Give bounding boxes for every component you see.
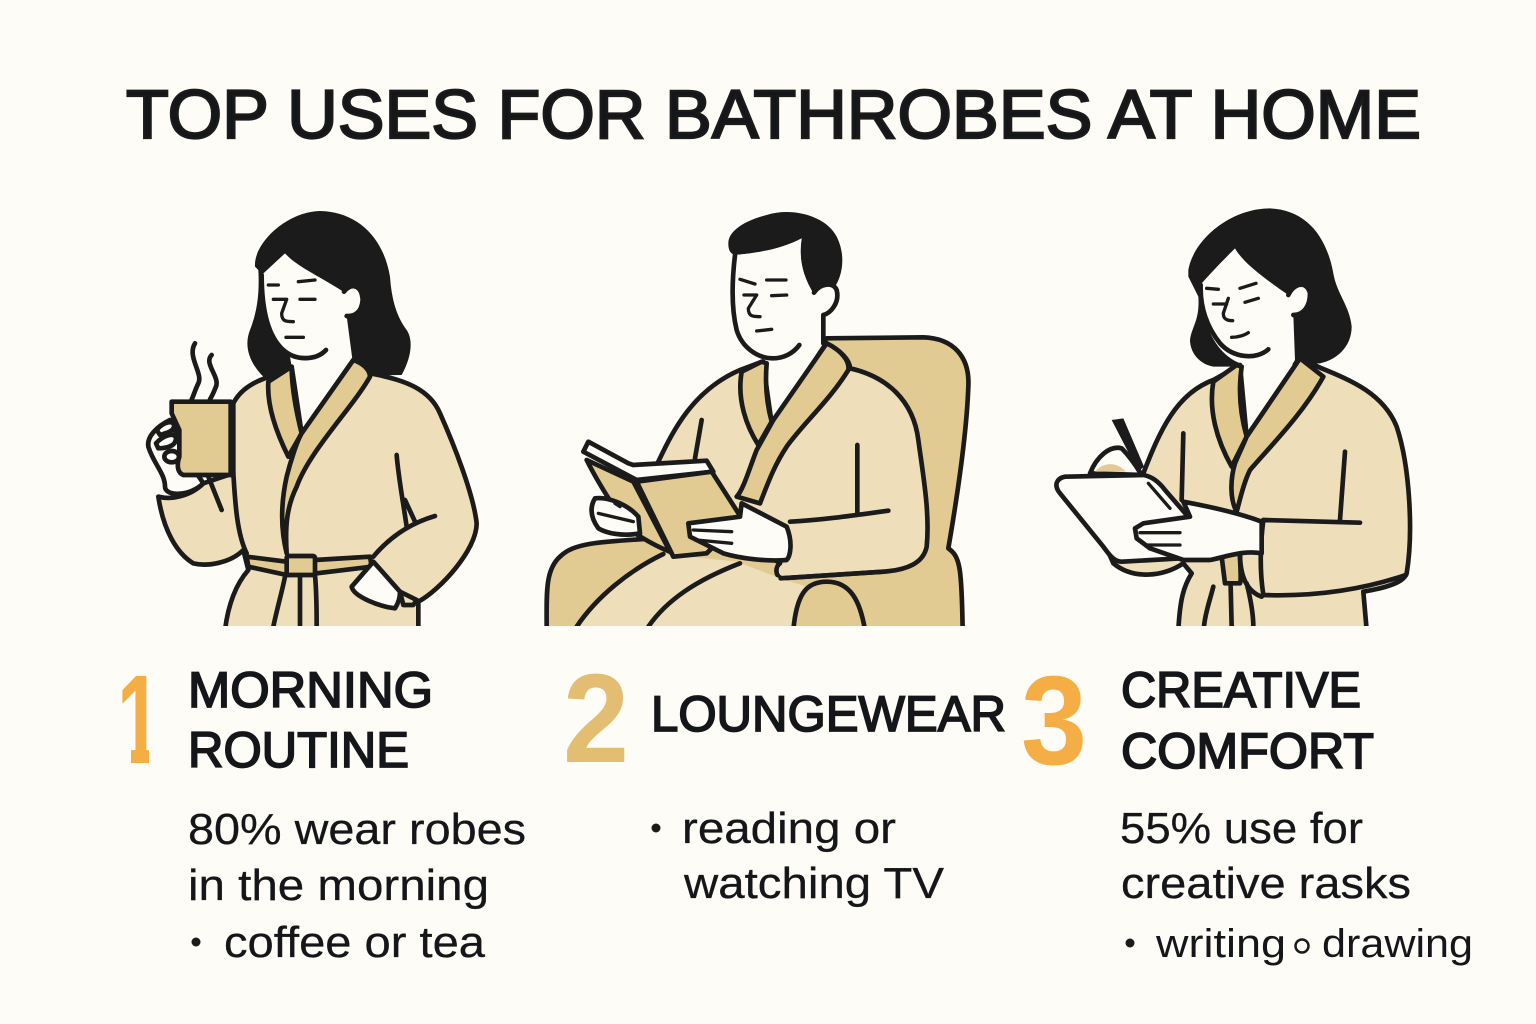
heading (188, 662, 433, 778)
illustration: woman writing on tablet (1056, 208, 1410, 630)
body text: in the morning (188, 861, 489, 910)
face and neck (1201, 248, 1310, 437)
blanket over lap (577, 554, 807, 627)
facial features (1207, 283, 1258, 337)
face and neck (262, 253, 363, 437)
right hand (1135, 502, 1262, 560)
body text: creative rasks (1121, 859, 1411, 908)
icon: coffee mug (172, 402, 231, 475)
icon: steam (192, 343, 217, 399)
heading: MORNING (188, 662, 433, 718)
body text: watching TV (683, 859, 945, 908)
body text (652, 804, 945, 908)
number 2: 2 (563, 648, 629, 789)
illustration: woman with coffee mug (148, 211, 477, 630)
robe body (1100, 358, 1410, 630)
armchair (547, 337, 968, 630)
heading: LOUNGEWEAR (651, 686, 1006, 742)
robe collar (740, 362, 772, 445)
section 2: loungewear (563, 648, 1006, 908)
number 3: 3 (1021, 650, 1087, 791)
chair arm (793, 582, 865, 630)
robe folds (695, 420, 888, 522)
heading: COMFORT (1121, 723, 1374, 779)
belt and tails (1222, 553, 1241, 583)
body text: 55% use for (1120, 804, 1363, 853)
body text (1120, 804, 1473, 966)
face and neck (733, 238, 837, 418)
illustration: man reading in armchair (547, 212, 968, 630)
hair (1188, 208, 1352, 367)
icon: tablet (1056, 475, 1187, 562)
body text: coffee or tea (224, 918, 486, 967)
section 3: creative comfort (1021, 650, 1473, 966)
robe body (158, 360, 477, 630)
body text: reading or (682, 804, 896, 853)
title: TOP USES FOR BATHROBES AT HOME (126, 76, 1421, 153)
robe folds (208, 455, 435, 557)
belt (247, 557, 372, 575)
belt tails (273, 575, 317, 627)
body text: 80% wear robes (188, 805, 526, 854)
hand holding mug (148, 420, 203, 494)
fingers (156, 422, 179, 462)
hair (247, 211, 411, 377)
number 1: 1 (117, 649, 161, 790)
heading (1121, 662, 1374, 779)
section 1: morning routine (122, 671, 524, 958)
robe body (658, 343, 928, 578)
hair (728, 212, 842, 293)
right hand (688, 503, 791, 560)
heading: ROUTINE (188, 722, 409, 778)
body text: writing (1155, 922, 1286, 966)
facial features (740, 279, 787, 331)
open book (583, 442, 742, 557)
left hand (592, 498, 640, 535)
robe collar (268, 367, 302, 457)
hand in pocket (352, 562, 400, 608)
writing hand (1090, 448, 1142, 475)
body text (188, 805, 526, 967)
robe folds (1182, 433, 1345, 520)
facial features (268, 280, 315, 337)
body text: drawing (1322, 922, 1473, 966)
heading: CREATIVE (1121, 662, 1361, 718)
icon: pen (1112, 418, 1144, 472)
sleeve (1261, 520, 1406, 595)
robe collar (1212, 365, 1247, 467)
